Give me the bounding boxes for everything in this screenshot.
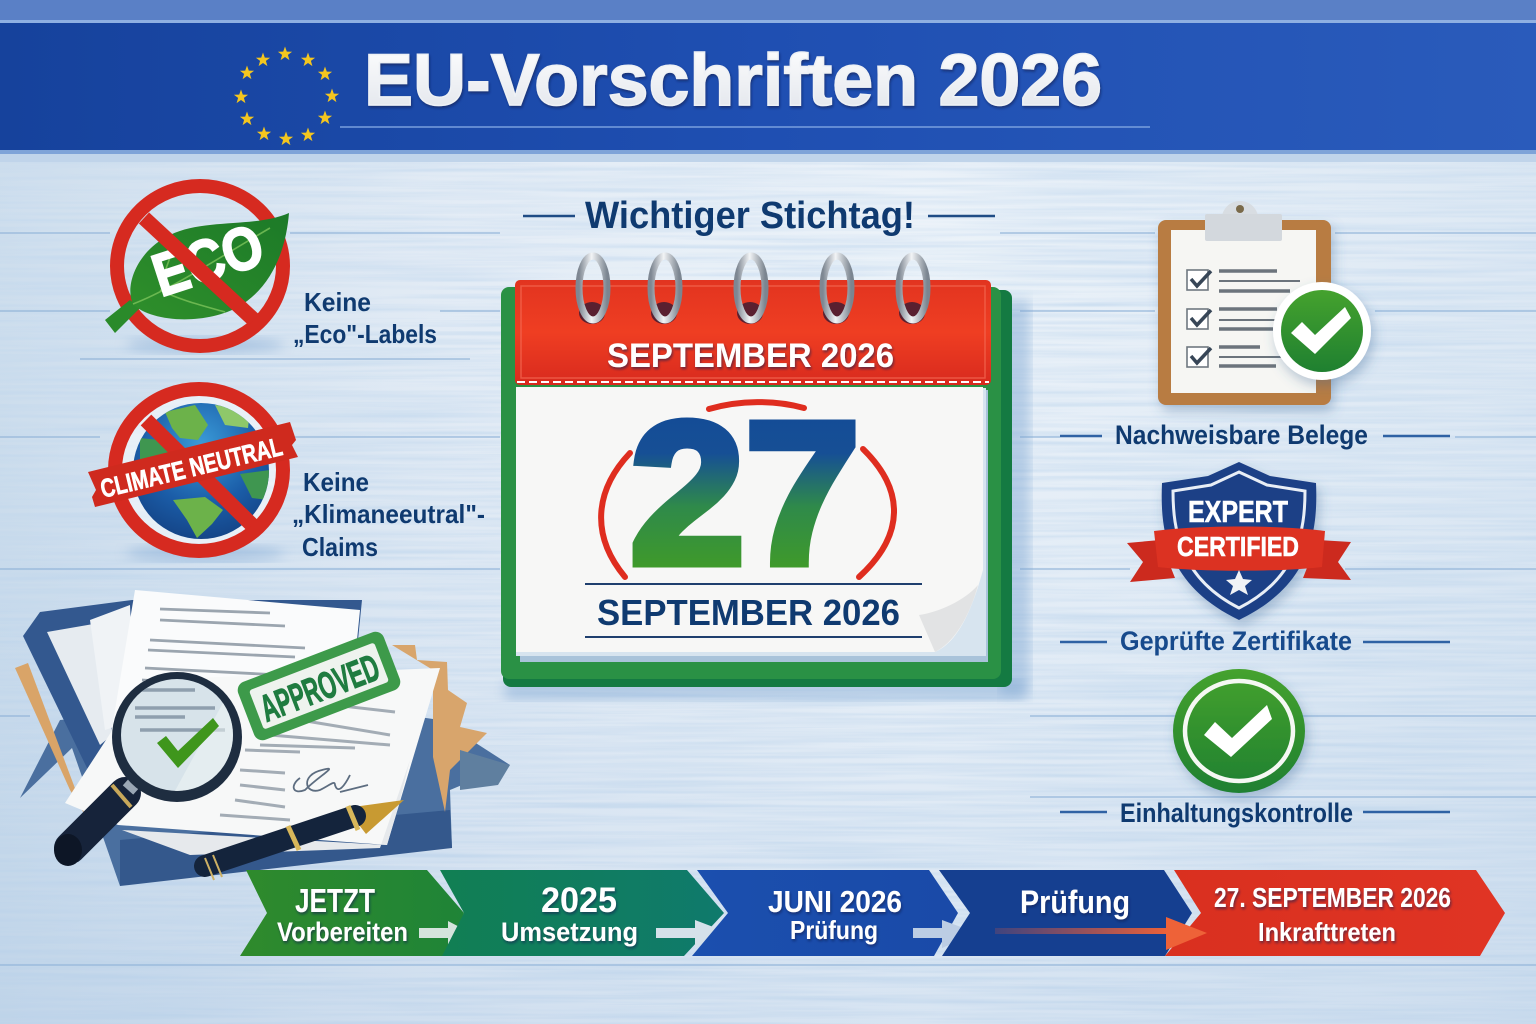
- label: keine eco labels: Keine: [304, 287, 371, 317]
- step: juni 2026: JUNI 2026: [768, 884, 902, 919]
- panel: verifiable evidence: [1060, 201, 1450, 450]
- heading: wichtiger stichtag: Wichtiger Stichtag!: [585, 195, 915, 237]
- icon: approved stamp: APPROVED: [255, 647, 385, 731]
- icon: magnifier: [54, 672, 242, 866]
- date rules: [585, 584, 922, 637]
- arrow: step 3 to 4: [913, 920, 977, 948]
- label: geprüfte zertifikate: Geprüfte Zertifikate: [1120, 626, 1352, 656]
- illustration: documents with magnifier, approved stamp and pen: [15, 590, 510, 886]
- icon: crossed-out globe with banner: [88, 389, 298, 561]
- calendar header: [515, 280, 991, 385]
- icon: fountain pen: [205, 800, 404, 880]
- icon: expert certified shield: EXPERT: [1188, 494, 1288, 529]
- label: keine klimaneutral claims: [292, 467, 485, 562]
- step: jetzt: JETZT: [295, 882, 375, 919]
- step: 2025: [440, 870, 724, 956]
- step: juni 2026: Prüfung: [790, 915, 878, 945]
- header month text: SEPTEMBER 2026: [607, 337, 894, 375]
- icon: crossed-out globe with banner: CLIMATE NEUTRAL: [97, 431, 285, 504]
- heading decorative rules: [523, 215, 995, 217]
- icon: crossed-out eco leaf: ECO: [144, 211, 272, 309]
- title text: EU-Vorschriften 2026: [364, 40, 1102, 121]
- icon: crossed-out eco leaf: [105, 186, 289, 353]
- step: juni 2026: [692, 870, 958, 956]
- timeline: chevron process: [240, 870, 1505, 956]
- panel: verified certificates: [1060, 462, 1450, 656]
- step: inkrafttreten: 27. SEPTEMBER 2026: [1214, 882, 1451, 913]
- icon: expert certified shield: CERTIFIED: [1177, 531, 1299, 562]
- icon: EU stars: [234, 46, 339, 145]
- red arcs around day number: [601, 402, 894, 577]
- icon: green check badge: [1173, 669, 1305, 793]
- spiral rings: [579, 256, 927, 324]
- step: 2025: Umsetzung: [501, 917, 638, 947]
- icon: expert certified shield: [1127, 462, 1351, 620]
- icon: signature: [294, 769, 368, 792]
- arrow: step 4 to 5: [995, 917, 1207, 950]
- arrow: step 2 to 3: [656, 920, 729, 948]
- step: prüfung: Prüfung: [1020, 884, 1130, 920]
- label: keine eco labels: „Eco"-Labels: [293, 319, 437, 349]
- step: jetzt: Vorbereiten: [277, 917, 408, 947]
- step: 2025: 2025: [541, 881, 617, 920]
- arrow: step 1 to 2: [419, 921, 471, 947]
- label: keine eco labels: [293, 287, 437, 349]
- panel: no climate neutral claims: [88, 389, 485, 562]
- panel: no eco labels: [105, 186, 437, 353]
- day number: 27: [630, 380, 860, 606]
- panel: compliance check: [1060, 669, 1450, 828]
- label: einhaltungskontrolle: Einhaltungskontrolle: [1120, 798, 1353, 828]
- date text: SEPTEMBER 2026: [597, 592, 900, 633]
- label: keine klimaneutral claims: Claims: [302, 532, 378, 562]
- label: keine klimaneutral claims: „Klimaneeutral"-: [292, 499, 485, 529]
- step: inkrafttreten: Inkrafttreten: [1258, 917, 1396, 947]
- step: prüfung: [939, 870, 1192, 956]
- calendar page: [516, 387, 983, 652]
- icon: clipboard with check: [1158, 201, 1371, 405]
- calendar page stack: [520, 390, 988, 662]
- label: keine klimaneutral claims: Keine: [303, 467, 369, 497]
- panel: calendar: [501, 256, 1030, 700]
- step: inkrafttreten: [1165, 870, 1505, 956]
- icon: approved stamp: [235, 629, 403, 743]
- label: nachweisbare belege: Nachweisbare Belege: [1115, 420, 1368, 450]
- step: jetzt: [240, 870, 464, 956]
- title banner: [0, 0, 1536, 162]
- paper stack: [15, 590, 510, 886]
